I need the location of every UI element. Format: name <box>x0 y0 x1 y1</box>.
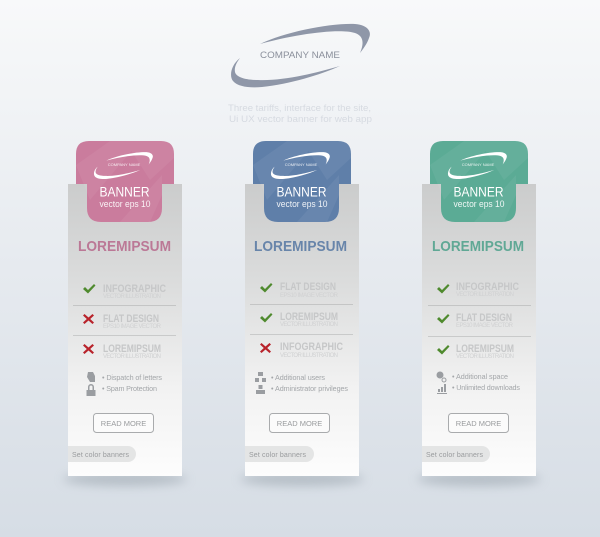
extras list: • Unlimited downloads <box>452 383 520 392</box>
color pill <box>245 446 314 462</box>
pink banner <box>76 141 174 222</box>
feature rows: VECTOR ILLUSTRATION <box>280 322 338 328</box>
panel: blue tariff <box>240 141 364 486</box>
green heading: LOREMIPSUM <box>432 238 524 255</box>
panel: pink tariff <box>63 141 187 486</box>
feature rows: EPS10 IMAGE VECTOR <box>103 324 162 330</box>
feature rows: INFOGRAPHIC <box>456 281 519 293</box>
feature rows: VECTOR ILLUSTRATION <box>280 353 338 359</box>
tagline: Three tariffs, interface for the site, <box>228 103 371 114</box>
green banner: COMPANY NAME <box>462 162 495 167</box>
feature rows: FLAT DESIGN <box>280 281 336 293</box>
read more button <box>448 414 508 432</box>
green banner: vector eps 10 <box>454 199 504 210</box>
feature rows: INFOGRAPHIC <box>103 283 166 295</box>
feature rows: LOREMIPSUM <box>456 343 514 355</box>
color pill <box>422 446 490 462</box>
feature rows <box>428 281 531 360</box>
color pill: Set color banners <box>249 452 306 459</box>
feature rows: INFOGRAPHIC <box>280 341 343 353</box>
feature rows: FLAT DESIGN <box>103 313 159 325</box>
tagline: Ui UX vector banner for web app <box>229 114 372 125</box>
color pill: Set color banners <box>426 452 484 459</box>
feature rows: LOREMIPSUM <box>280 311 338 323</box>
pink banner: COMPANY NAME <box>108 162 141 167</box>
color pill <box>68 446 136 462</box>
extras list <box>255 372 348 394</box>
feature rows: EPS10 IMAGE VECTOR <box>456 323 514 329</box>
feature rows: VECTOR ILLUSTRATION <box>456 354 514 360</box>
green banner <box>430 141 528 222</box>
read more button <box>94 414 154 432</box>
extras list <box>436 372 520 394</box>
read more button: READ MORE <box>277 419 322 428</box>
panel: green tariff <box>417 141 541 486</box>
color pill: Set color banners <box>72 452 130 459</box>
read more button <box>270 414 330 432</box>
feature rows: VECTOR ILLUSTRATION <box>456 292 514 298</box>
extras list: • Dispatch of letters <box>102 373 162 382</box>
pink banner: BANNER <box>100 184 150 200</box>
blue banner: vector eps 10 <box>276 199 328 210</box>
extras list: • Administrator privileges <box>271 384 348 393</box>
extras list: • Additional users <box>271 373 325 382</box>
green banner: BANNER <box>454 184 504 200</box>
feature rows: VECTOR ILLUSTRATION <box>103 294 161 300</box>
feature rows <box>73 283 176 360</box>
extras list <box>86 372 162 396</box>
blue banner <box>253 141 351 222</box>
read more button: READ MORE <box>456 419 501 428</box>
extras list: • Spam Protection <box>102 384 157 393</box>
feature rows: VECTOR ILLUSTRATION <box>103 354 161 360</box>
feature rows: EPS10 IMAGE VECTOR <box>280 293 339 299</box>
company logo <box>231 24 370 87</box>
read more button: READ MORE <box>101 419 146 428</box>
extras list: • Additional space <box>452 372 508 381</box>
feature rows <box>250 281 353 359</box>
feature rows: FLAT DESIGN <box>456 312 512 324</box>
blue heading: LOREMIPSUM <box>254 238 347 255</box>
pink heading: LOREMIPSUM <box>78 238 171 255</box>
blue banner: BANNER <box>276 184 326 200</box>
blue banner: COMPANY NAME <box>285 162 318 167</box>
feature rows: LOREMIPSUM <box>103 343 161 355</box>
company logo: COMPANY NAME <box>260 50 340 61</box>
tagline <box>228 103 372 125</box>
pink banner: vector eps 10 <box>100 199 150 210</box>
